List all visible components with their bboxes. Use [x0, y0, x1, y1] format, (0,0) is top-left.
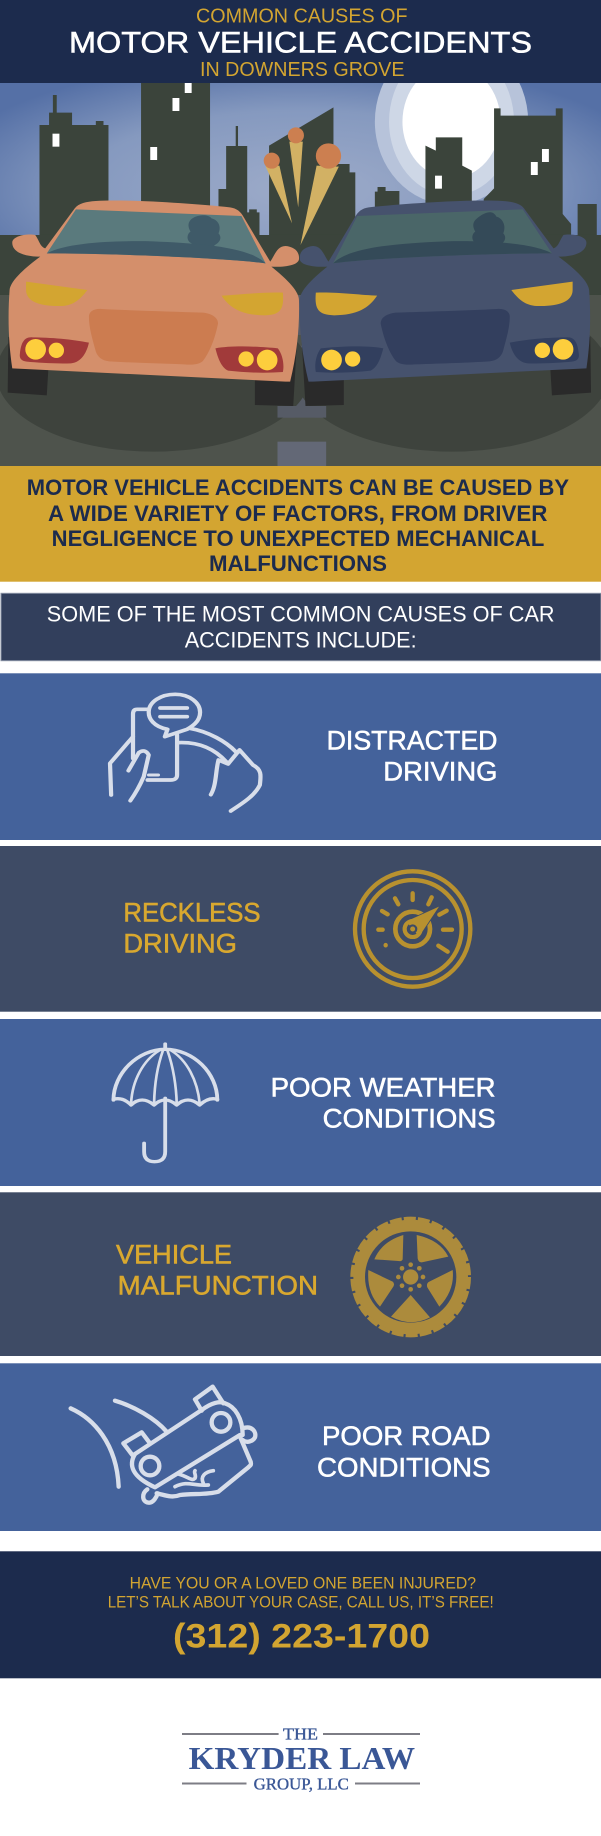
subheading text: SOME OF THE MOST COMMON CAUSES OF CAR: [47, 602, 555, 627]
intro text: [27, 475, 569, 576]
label: vehicle malfunction: [116, 1239, 318, 1300]
title line: in downers grove: IN DOWNERS GROVE: [200, 59, 404, 81]
label: poor weather conditions: [271, 1073, 496, 1133]
icon: umbrella: [113, 1044, 217, 1162]
subheading text: ACCIDENTS INCLUDE:: [185, 627, 417, 652]
logo: the kryder law group: THE: [283, 1724, 318, 1743]
icon: speedometer: [355, 871, 470, 987]
logo: the kryder law group: GROUP, LLC: [254, 1774, 349, 1793]
icon: wheel: [352, 1219, 469, 1335]
hero illustration: two cars colliding in a city at night: [0, 83, 601, 466]
car: navy: [300, 200, 591, 406]
panel: poor road conditions: [0, 1363, 601, 1531]
subheading panel: [1, 593, 601, 661]
subheading text: [47, 602, 555, 652]
label: vehicle malfunction: VEHICLE: [116, 1239, 232, 1269]
panel: poor weather conditions: [0, 1019, 601, 1186]
call to action text: HAVE YOU OR A LOVED ONE BEEN INJURED?: [130, 1574, 476, 1592]
moon: [374, 83, 528, 201]
icon: overturned car: [71, 1387, 255, 1503]
label: distracted driving: DISTRACTED: [327, 725, 498, 755]
intro text: NEGLIGENCE TO UNEXPECTED MECHANICAL: [52, 526, 544, 551]
phone number: (312) 223-1700: [173, 1618, 430, 1656]
call to action text: [108, 1574, 494, 1611]
intro panel: [0, 466, 601, 582]
sky: [0, 83, 601, 235]
label: poor weather conditions: POOR WEATHER: [271, 1073, 496, 1103]
icon: phone in hand while driving: [110, 694, 261, 811]
city skyline: [0, 83, 601, 297]
lit windows: [53, 83, 549, 189]
logo: the kryder law group: KRYDER LAW: [189, 1740, 415, 1776]
title line: common causes of: COMMON CAUSES OF: [196, 6, 408, 28]
call to action panel: [0, 1551, 601, 1678]
label: poor road conditions: CONDITIONS: [317, 1453, 491, 1483]
road: [0, 295, 601, 466]
intro text: MALFUNCTIONS: [209, 551, 387, 576]
collision burst: [264, 127, 341, 245]
panel: vehicle malfunction: [0, 1192, 601, 1356]
label: poor road conditions: [317, 1421, 491, 1483]
label: reckless driving: DRIVING: [123, 929, 237, 959]
intro text: MOTOR VEHICLE ACCIDENTS CAN BE CAUSED BY: [27, 475, 569, 500]
panel: distracted driving: [0, 673, 601, 840]
intro text: A WIDE VARIETY OF FACTORS, FROM DRIVER: [48, 501, 547, 526]
label: poor road conditions: POOR ROAD: [322, 1421, 491, 1451]
label: distracted driving: DRIVING: [383, 757, 497, 787]
title line: motor vehicle accidents: MOTOR VEHICLE ACCIDENTS: [69, 26, 532, 59]
label: poor weather conditions: CONDITIONS: [323, 1103, 496, 1133]
car: orange: [8, 200, 299, 406]
panel: reckless driving: [0, 846, 601, 1012]
label: vehicle malfunction: MALFUNCTION: [118, 1270, 318, 1300]
title banner: [0, 0, 601, 83]
label: reckless driving: RECKLESS: [123, 898, 261, 928]
label: reckless driving: [123, 898, 261, 959]
logo: the kryder law group: [182, 1724, 420, 1793]
label: distracted driving: [327, 725, 498, 787]
call to action text: LET’S TALK ABOUT YOUR CASE, CALL US, IT’S FREE!: [108, 1593, 494, 1611]
